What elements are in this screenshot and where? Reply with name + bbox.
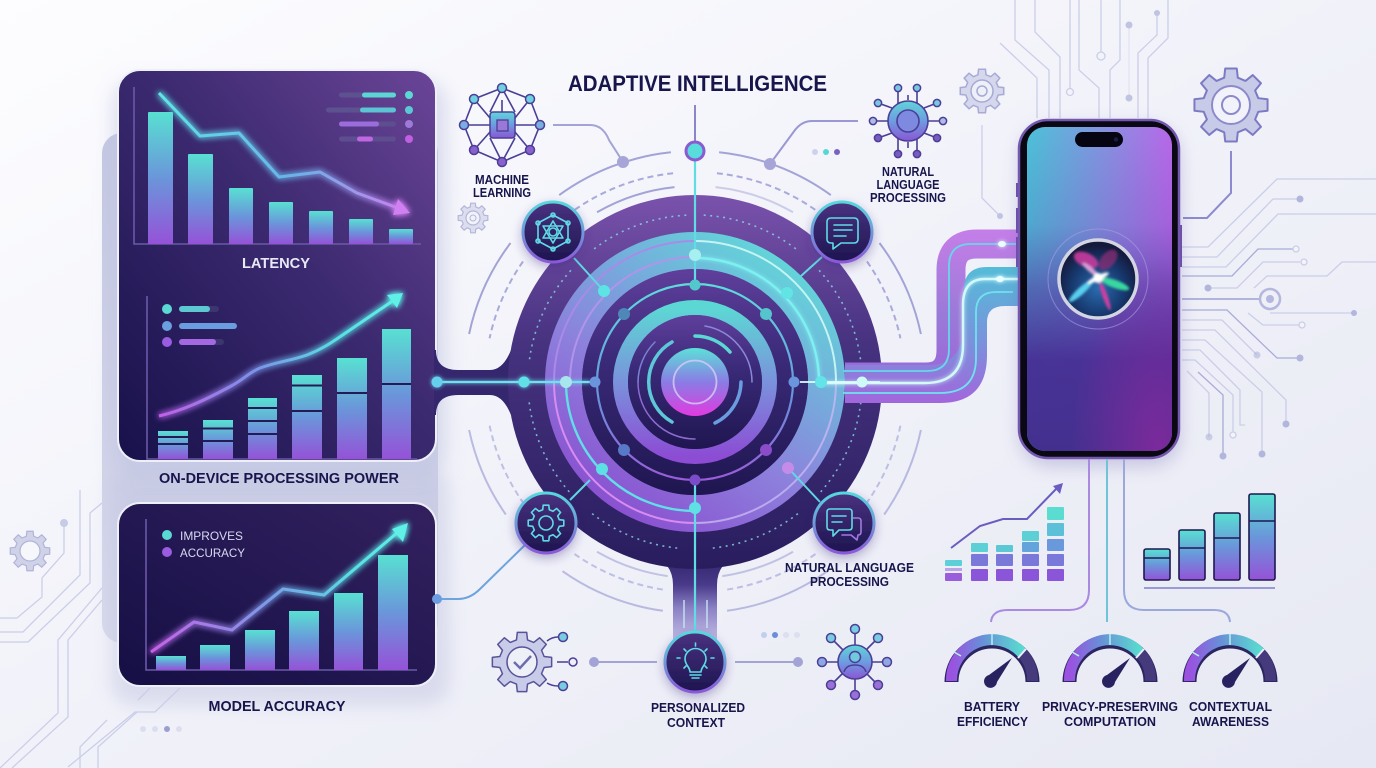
label: privacy-preserving computation: COMPUTATION xyxy=(1064,714,1156,729)
hub connector lines xyxy=(436,105,880,640)
power chart axes xyxy=(147,296,417,459)
phone shadow xyxy=(1020,126,1180,466)
connector right of bulb xyxy=(735,657,803,667)
gauge: privacy-preserving computation xyxy=(1069,634,1151,688)
label: natural language processing top xyxy=(870,165,946,205)
pipe nodes xyxy=(996,241,1006,282)
icon: machine learning network xyxy=(460,84,544,166)
power stacked bars xyxy=(158,329,411,459)
main colour band xyxy=(564,250,826,514)
model accuracy connector node xyxy=(432,594,442,604)
decorative dot row xyxy=(812,149,840,155)
dotted ring xyxy=(529,215,861,548)
satellite: language chat xyxy=(812,202,872,262)
label: contextual awareness: AWARENESS xyxy=(1192,714,1269,729)
label: on-device processing power: ON-DEVICE PROCESSING POWER xyxy=(159,471,400,487)
chart: outlined bars xyxy=(1144,494,1275,588)
phone screen xyxy=(1027,127,1172,451)
outer arcs around hub xyxy=(469,152,921,611)
phone xyxy=(1016,120,1182,466)
panel backdrop shadow xyxy=(102,80,450,706)
label: contextual awareness: CONTEXTUAL xyxy=(1189,699,1272,714)
inner core background xyxy=(628,315,762,449)
second band xyxy=(620,308,770,456)
label: battery efficiency: BATTERY xyxy=(964,699,1020,714)
label: natural language processing top: NATURAL xyxy=(882,165,934,179)
gauge: contextual awareness xyxy=(1189,634,1271,688)
dynamic island xyxy=(1075,132,1123,147)
label: personalized context: PERSONALIZED xyxy=(651,701,745,715)
top centre node xyxy=(686,142,704,160)
data pipes to phone xyxy=(821,244,1019,403)
accuracy trend arrow xyxy=(151,523,408,652)
icon: gear top right xyxy=(1194,68,1268,142)
node ring xyxy=(597,284,793,480)
accuracy bars xyxy=(156,555,408,670)
latency legend xyxy=(326,91,413,143)
inner dark disc xyxy=(582,269,808,495)
label: machine learning xyxy=(473,173,531,200)
icon: gear with check xyxy=(492,632,577,692)
chart: stacked blocks with arrow xyxy=(945,483,1064,581)
dark connector bar from panel to hub xyxy=(434,350,530,415)
icon: faint gear by machine learning xyxy=(458,203,488,233)
icon: small gear top xyxy=(960,69,1004,113)
hub nodes xyxy=(432,249,868,514)
core inner ring xyxy=(674,360,716,404)
latency bars xyxy=(148,112,413,244)
gear connector line xyxy=(1183,151,1231,218)
label: natural language processing lower xyxy=(785,560,914,589)
band highlight arcs xyxy=(554,241,836,523)
decorative dots above person icon xyxy=(761,632,800,638)
satellite: natural language processing chat xyxy=(814,493,874,553)
label: machine learning: LEARNING xyxy=(473,186,531,200)
satellite: context gear xyxy=(516,493,576,553)
circuit traces: left xyxy=(0,490,182,768)
label: battery efficiency: EFFICIENCY xyxy=(957,714,1028,729)
label: model accuracy: MODEL ACCURACY xyxy=(208,698,346,715)
accuracy legend xyxy=(162,529,245,560)
accuracy legend: ACCURACY xyxy=(180,546,245,560)
satellite: personalized context bulb xyxy=(665,632,725,692)
label: machine learning: MACHINE xyxy=(475,173,529,187)
label: privacy-preserving computation xyxy=(1042,699,1178,729)
icon: natural language network xyxy=(869,84,947,158)
panel: model accuracy xyxy=(118,503,436,686)
label: natural language processing lower: PROCESSING xyxy=(810,574,889,589)
label: battery efficiency xyxy=(957,699,1028,729)
hub: concentric rings xyxy=(508,195,882,569)
latency chart axes xyxy=(134,87,421,244)
label: latency: LATENCY xyxy=(242,256,310,272)
bottom stem xyxy=(650,555,740,640)
phone body xyxy=(1019,120,1179,458)
small gear trace xyxy=(982,125,1003,219)
phone side buttons xyxy=(1016,183,1182,267)
power legend xyxy=(162,304,237,347)
outer disc xyxy=(508,195,882,569)
swirl arcs xyxy=(638,326,752,439)
label: personalized context: CONTEXT xyxy=(667,716,725,730)
gauge: battery efficiency xyxy=(951,634,1033,688)
siri orb xyxy=(1048,229,1148,329)
circuit traces: top xyxy=(1000,0,1168,118)
accuracy legend: IMPROVES xyxy=(180,529,243,543)
panel: latency and on-device processing power xyxy=(118,70,436,461)
label: personalized context xyxy=(651,701,745,730)
label: natural language processing lower: NATURAL LANGUAGE xyxy=(785,560,914,575)
connector: natural language processing xyxy=(764,121,858,170)
phone connector lines down to gauges xyxy=(991,459,1230,622)
core xyxy=(661,348,729,416)
accuracy axes xyxy=(146,519,417,670)
label: contextual awareness xyxy=(1189,699,1272,729)
title: ADAPTIVE INTELLIGENCE xyxy=(568,71,827,96)
icon: gear left xyxy=(10,531,50,571)
circuit traces: right xyxy=(1182,179,1376,460)
icon: person network xyxy=(818,624,892,700)
latency trend arrow xyxy=(159,93,410,215)
connector: machine learning xyxy=(553,125,629,168)
connector left of bulb xyxy=(589,657,657,667)
power trend arrow xyxy=(159,293,403,416)
satellite: machine learning xyxy=(523,202,583,262)
label: natural language processing top: PROCESSING xyxy=(870,191,946,205)
label: privacy-preserving computation: PRIVACY-PRESERVING xyxy=(1042,699,1178,714)
label: natural language processing top: LANGUAGE xyxy=(876,178,940,192)
